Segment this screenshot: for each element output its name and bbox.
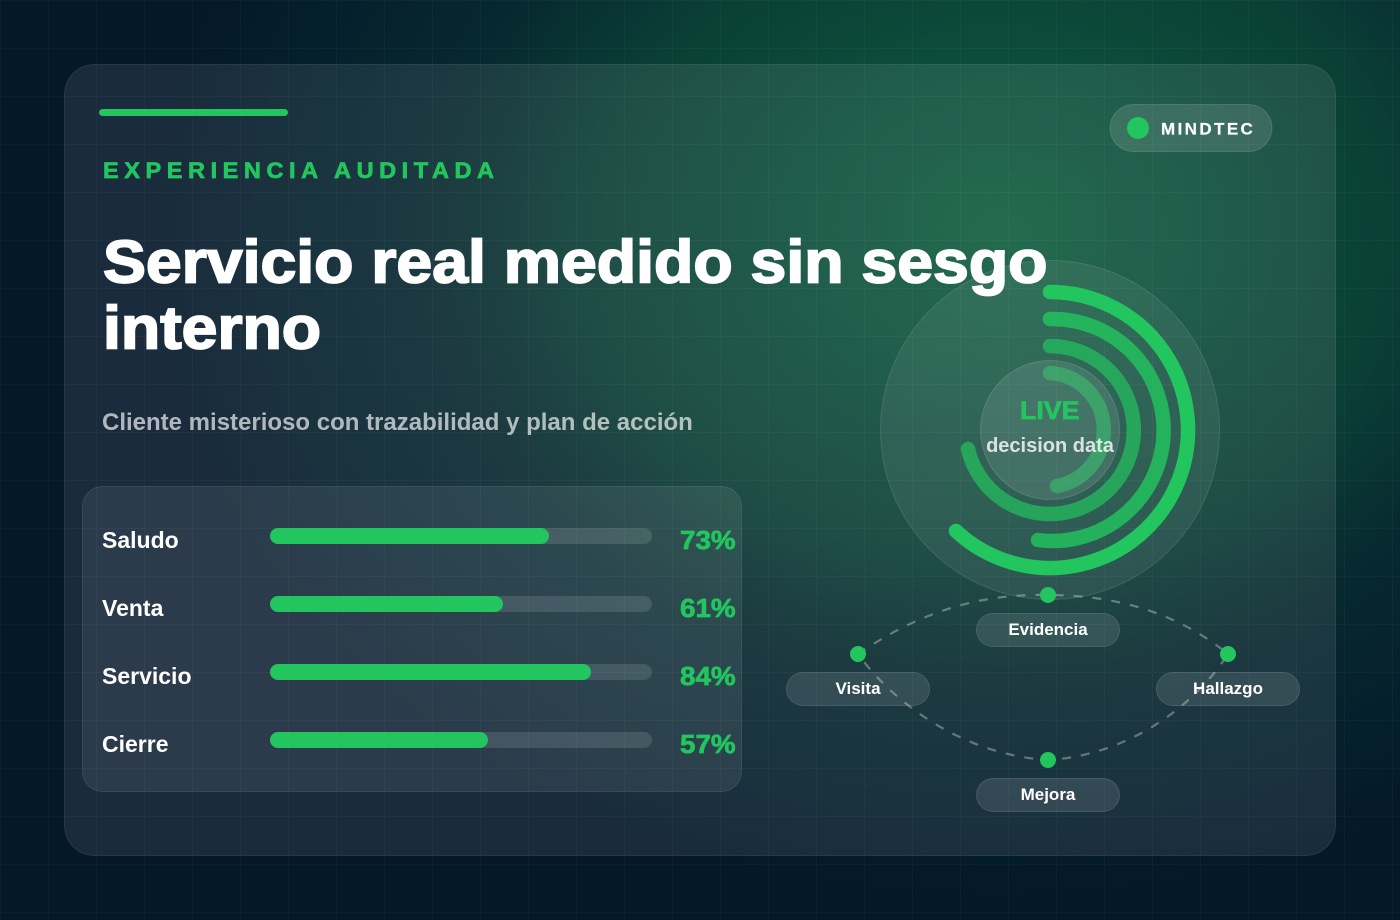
metric: Servicio (102, 662, 736, 691)
step: Evidencia (976, 587, 1120, 646)
outer disc (880, 260, 1220, 600)
panel: main glass card (64, 64, 1336, 856)
metric: Cierre (102, 730, 736, 759)
center label: LIVE: LIVE (1020, 398, 1079, 425)
title: Servicio real medido sin sesgo (103, 229, 1047, 296)
step: Visita: Visita (835, 679, 881, 698)
step: Visita (786, 646, 930, 706)
ring: 57% (1050, 373, 1104, 486)
chart: radial rings (880, 260, 1220, 600)
badge: MINDTEC: MINDTEC (1161, 120, 1255, 138)
ring: 84% (968, 346, 1134, 514)
metric: Saludo (102, 526, 736, 555)
step: Mejora (976, 752, 1120, 812)
metric: Servicio: Servicio (102, 663, 192, 689)
metric: Venta: Venta (102, 595, 164, 621)
dashed connectors (858, 595, 1228, 760)
title: interno (103, 295, 321, 362)
accent line (99, 109, 288, 116)
metric: Servicio: 84% (680, 662, 736, 691)
badge: MINDTEC (1110, 104, 1272, 152)
panel: metrics (82, 486, 742, 792)
metric: Cierre: Cierre (102, 731, 168, 757)
metric: Venta: 61% (680, 594, 736, 623)
step: Hallazgo: Hallazgo (1193, 679, 1263, 698)
eyebrow: EXPERIENCIA AUDITADA (103, 158, 500, 183)
process loop (786, 587, 1300, 812)
step: Hallazgo (1156, 646, 1300, 706)
metric: Saludo: 73% (680, 526, 736, 555)
center label: decision data: decision data (986, 435, 1115, 457)
center disc (980, 360, 1120, 500)
step: Mejora: Mejora (1021, 785, 1076, 804)
metric: Saludo: Saludo (102, 527, 179, 553)
subtitle: Cliente misterioso con trazabilidad y plan de acción (102, 409, 693, 436)
step: Evidencia: Evidencia (1008, 620, 1088, 639)
metric: Cierre: 57% (680, 730, 736, 759)
metric: Venta (102, 594, 736, 623)
ring: 61% (1038, 319, 1164, 541)
ring: 73% (956, 292, 1188, 568)
